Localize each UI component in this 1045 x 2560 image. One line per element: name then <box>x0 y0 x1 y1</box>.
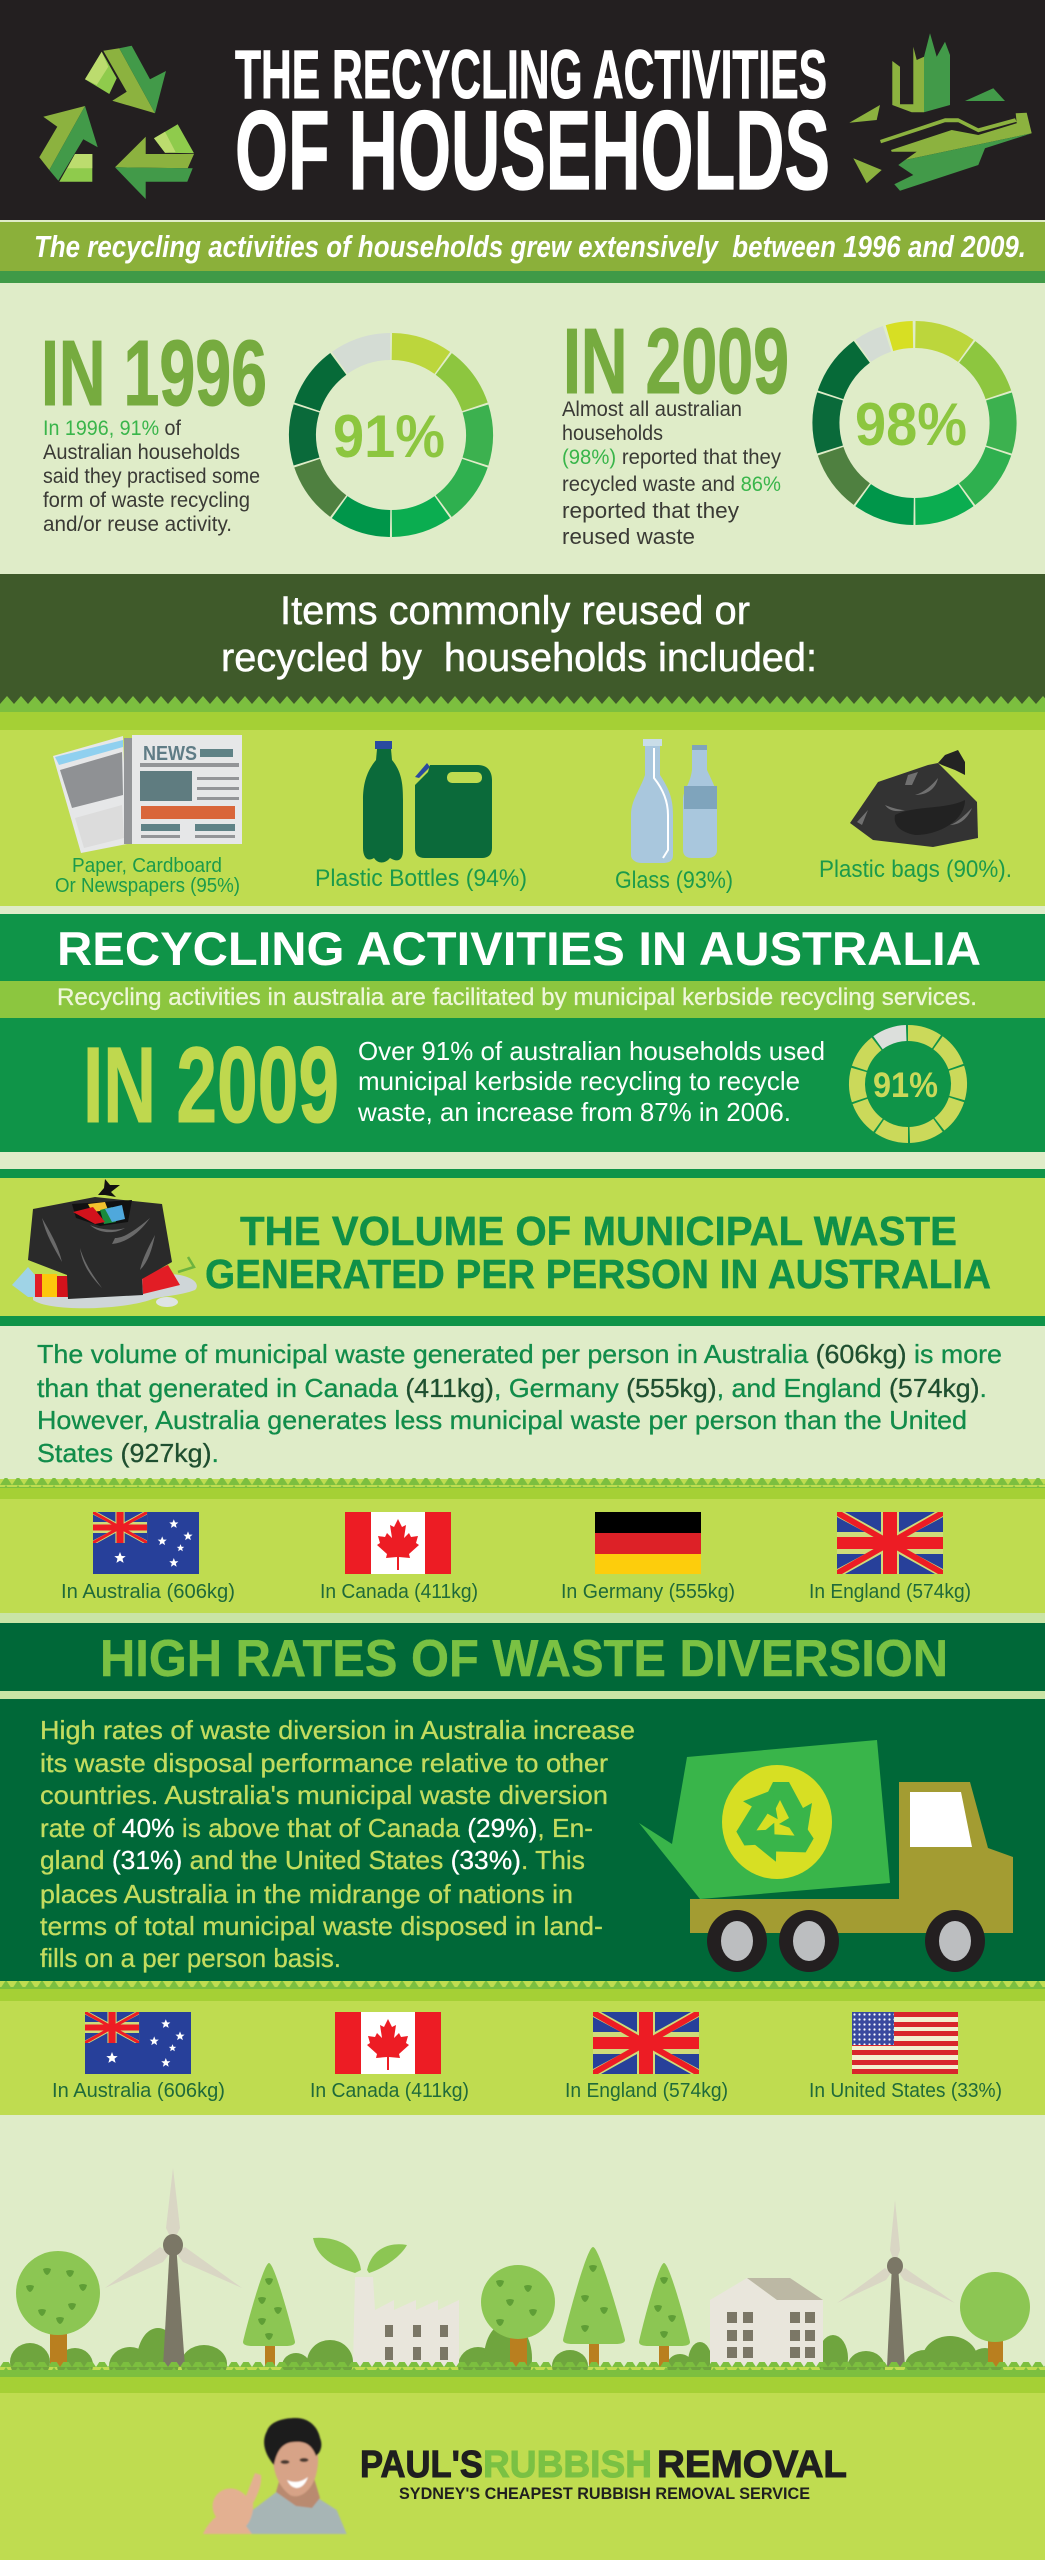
text: 1996 description <box>43 417 260 536</box>
text: diversion paragraph: fills on a per person basis. <box>40 1943 341 1973</box>
text: volume paragraph: The volume of municipal waste generated per person in Australia (606kg) is more <box>37 1339 1002 1369</box>
label: paper: Paper, Cardboard <box>72 855 222 877</box>
text: 2009 description: (98%) reported that they <box>562 446 781 469</box>
heading: items: Items commonly reused or <box>280 589 750 633</box>
text: diversion paragraph: High rates of waste diversion in Australia increase <box>40 1715 635 1745</box>
labels: countries: In England (574kg) <box>809 1581 971 1603</box>
chart: donut 91%: 91% <box>873 1066 938 1105</box>
icon: newspaper <box>53 735 242 853</box>
logo text: RUBBISH <box>483 2444 652 2486</box>
panel: 1996 vs 2009 <box>0 283 1045 574</box>
bushes <box>10 2322 1003 2394</box>
text: 2009 description: reused waste <box>562 524 695 549</box>
heading: volume of municipal waste: THE VOLUME OF MUNICIPAL WASTE <box>240 1208 957 1254</box>
tree: cone tall <box>563 2247 625 2367</box>
label: paper: Or Newspapers (95%) <box>55 875 240 897</box>
photo: man with thumbs up <box>203 2418 347 2534</box>
flag: australia <box>93 1512 199 1574</box>
panel: header <box>0 0 1045 220</box>
flag: england <box>837 1512 943 1574</box>
icon: broken bottle <box>849 33 1032 191</box>
heading: high rates: HIGH RATES OF WASTE DIVERSION <box>100 1630 948 1688</box>
logo text: REMOVAL <box>657 2444 847 2486</box>
text: volume paragraph: States (927kg). <box>37 1438 219 1468</box>
labels: countries: In England (574kg) <box>565 2080 728 2102</box>
icon: newspaper: NEWS <box>143 743 197 765</box>
panel: flags row one <box>0 1478 1045 1613</box>
text: kerbside description: waste, an increase from 87% in 2006. <box>357 1097 791 1127</box>
icon: house <box>710 2278 823 2366</box>
text: diversion paragraph: gland (31%) and the United States (33%). This <box>40 1845 585 1875</box>
flag: australia <box>85 2012 191 2074</box>
heading: in 1996: IN 1996 <box>41 321 267 425</box>
text: volume paragraph: However, Australia generates less municipal waste per person than the United <box>37 1405 967 1435</box>
icon: overflowing rubbish bag <box>12 1179 197 1308</box>
panel: subtitle banner <box>0 220 1045 283</box>
label: glass: Glass (93%) <box>615 867 733 894</box>
labels: countries: In Australia (606kg) <box>52 2080 225 2102</box>
heading: items: recycled by households included: <box>221 636 817 680</box>
labels: countries <box>61 1581 971 1603</box>
text: 2009 description: households <box>562 422 663 445</box>
text: 1996 description: and/or reuse activity. <box>43 513 232 536</box>
text: 1996 description: said they practised some <box>43 465 260 488</box>
heading: volume of municipal waste: GENERATED PER PERSON IN AUSTRALIA <box>205 1251 991 1297</box>
text: volume paragraph <box>37 1339 1002 1468</box>
chart: donut 91%: 91% <box>333 403 445 470</box>
tree: cone small <box>639 2263 690 2367</box>
panel: items heading <box>0 574 1045 704</box>
tree: round middle <box>481 2265 555 2367</box>
labels: countries: In Australia (606kg) <box>61 1581 235 1603</box>
panel: footer <box>0 2393 1045 2560</box>
labels: countries: In Canada (411kg) <box>310 2080 469 2102</box>
chart: donut 91% <box>837 1013 979 1155</box>
text: 2009 description <box>562 398 781 549</box>
heading: items <box>221 589 817 680</box>
label: plastic bottles: Plastic Bottles (94%) <box>315 865 527 892</box>
title <box>235 36 830 213</box>
chart: donut 98% <box>791 299 1038 547</box>
chart: donut 91% <box>267 311 515 559</box>
icon: wind turbine left <box>105 2168 242 2367</box>
text: kerbside subheading: Recycling activities in australia are facilitated by municipal kerbside recycling services. <box>57 984 977 1011</box>
flag: england <box>593 2012 699 2074</box>
heading: in 2009: IN 2009 <box>563 309 789 413</box>
icon: factory with leaves <box>313 2238 459 2366</box>
logo text <box>360 2444 847 2486</box>
text: diversion paragraph: its waste disposal performance relative to other <box>40 1748 608 1778</box>
text: diversion paragraph: rate of 40% is above that of Canada (29%), En- <box>40 1813 593 1843</box>
panel: landscape illustration <box>0 2115 1045 2394</box>
label: paper <box>55 855 240 897</box>
heading: volume of municipal waste <box>205 1208 991 1297</box>
tree: round left <box>16 2251 100 2367</box>
text: 1996 description: In 1996, 91% of <box>43 417 181 440</box>
heading: in 2009: IN 2009 <box>83 1024 339 1145</box>
text: 2009 description: reported that they <box>562 498 739 523</box>
text: diversion paragraph: terms of total municipal waste disposed in land- <box>40 1911 603 1941</box>
text: 1996 description: Australian households <box>43 441 240 464</box>
ground <box>0 2362 1045 2393</box>
heading: recycling activities: RECYCLING ACTIVITIES IN AUSTRALIA <box>57 922 981 975</box>
logo text: PAUL'S <box>360 2444 483 2486</box>
text: 2009 description: Almost all australian <box>562 398 742 421</box>
text: kerbside description <box>357 1036 825 1127</box>
flag: united states <box>852 2012 958 2074</box>
flag: canada <box>345 1512 451 1574</box>
labels: countries: In United States (33%) <box>809 2080 1002 2102</box>
panel: recycling activities in australia <box>0 906 1045 1155</box>
icon: plastic bottle and jerry can <box>363 741 492 862</box>
panel: flags row two <box>0 1981 1045 2115</box>
tagline: SYDNEY'S CHEAPEST RUBBISH REMOVAL SERVICE <box>399 2484 810 2503</box>
panel: commonly recycled items <box>0 696 1045 906</box>
icon: recycling truck <box>639 1740 1013 1972</box>
panel: volume of municipal waste <box>0 1152 1045 1479</box>
panel: high rates of waste diversion <box>0 1613 1045 1981</box>
flag: canada <box>335 2012 441 2074</box>
text: diversion paragraph: places Australia in the midrange of nations in <box>40 1879 573 1909</box>
chart: donut 98%: 98% <box>855 391 967 458</box>
label: plastic bags: Plastic bags (90%). <box>819 856 1012 883</box>
text: kerbside description: Over 91% of australian households used <box>358 1036 825 1066</box>
icon: wind turbine right <box>837 2200 955 2367</box>
icon: recycling arrows <box>39 46 194 199</box>
labels: countries: In Germany (555kg) <box>561 1581 735 1603</box>
text: volume paragraph: than that generated in Canada (411kg), Germany (555kg), and England (574kg). <box>37 1373 987 1403</box>
icon: black plastic bag <box>850 750 978 847</box>
text: 2009 description: recycled waste and 86% <box>562 473 781 496</box>
text: kerbside description: municipal kerbside recycling to recycle <box>358 1066 800 1096</box>
tree: round right <box>960 2272 1030 2367</box>
leaf spots <box>26 2265 1019 2340</box>
text: diversion paragraph: countries. Australia's municipal waste diversion <box>40 1780 608 1810</box>
labels: countries <box>52 2080 1002 2102</box>
flag: germany <box>595 1512 701 1574</box>
text: 1996 description: form of waste recycling <box>43 489 250 512</box>
icon: glass bottles <box>631 739 717 863</box>
tree: cone <box>243 2263 295 2367</box>
labels: countries: In Canada (411kg) <box>320 1581 478 1603</box>
text: diversion paragraph <box>40 1715 635 1973</box>
